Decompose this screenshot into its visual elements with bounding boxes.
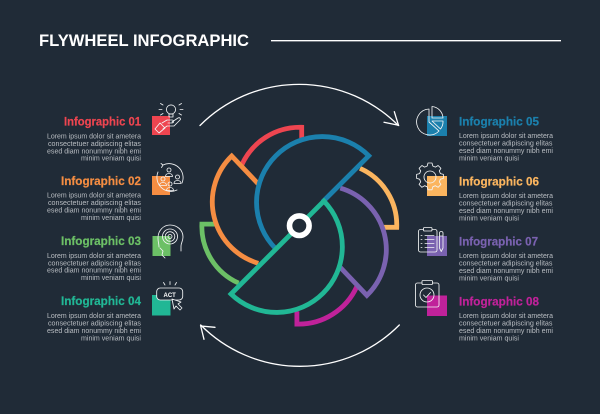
text block 01: consectetuer adipiscing elitas [48,141,142,148]
panel: infographic 02 [47,164,183,222]
arrow: top clockwise [200,84,398,126]
text block 05: esed diam nonummy nibh emi [459,148,553,155]
text block 02: esed diam nonummy nibh emi [47,208,141,214]
panel: infographic 05 [417,106,553,162]
blade: green [202,224,239,283]
act label: ACT [164,293,176,299]
blade: blue half disc [257,137,369,249]
text block 08: consectetuer adipiscing elitas [459,320,553,328]
blade: magenta [297,286,357,324]
text block 06 [459,193,553,222]
heading 02: Infographic 02 [61,174,141,188]
heading 01: Infographic 01 [64,114,141,128]
arrow: bottom clockwise [201,325,399,366]
heading 05: Infographic 05 [459,114,539,128]
icon: pie chart [417,106,447,136]
text block 07: esed diam nonummy nibh emi [459,268,553,275]
panel: infographic 03 [47,225,183,282]
text block 04: consectetuer adipiscing elitas [48,320,142,328]
heading 04: Infographic 04 [61,294,141,308]
icon: team cycle [152,164,183,195]
icon: checklist and pencil [418,228,447,256]
text block 01: Lorem ipsum dolor sit ametera [47,133,141,140]
panel: infographic 08 [416,280,553,342]
text block 03: esed diam nonummy nibh emi [47,268,141,275]
text block 05: consectetuer adipiscing elitas [459,140,553,148]
text block 02: minim veniam quisi [81,215,141,222]
heading 07: Infographic 07 [459,234,538,248]
panel: infographic 04 [47,282,183,342]
text block 04 [47,313,142,342]
icon: gears [417,163,447,196]
text block 08: esed diam nonummy nibh emi [459,328,553,335]
text block 06: Lorem ipsum dolor sit ametera [459,193,553,200]
heading 06: Infographic 06 [459,174,539,188]
text block 02: Lorem ipsum dolor sit ametera [47,193,141,200]
text block 03 [47,253,142,282]
text block 05: Lorem ipsum dolor sit ametera [459,133,553,140]
text block 07: Lorem ipsum dolor sit ametera [459,253,553,260]
panel: infographic 06 [417,163,553,222]
text block 07 [459,253,553,282]
text block 03: minim veniam quisi [81,275,141,282]
text block 08 [459,313,553,342]
icon: head with gear [152,225,183,258]
text block 06: consectetuer adipiscing elitas [459,200,553,208]
blade: purple [340,188,386,295]
text block 03: Lorem ipsum dolor sit ametera [47,253,141,260]
text block 05 [459,133,553,162]
hub ring [290,216,309,236]
heading 08: Infographic 08 [459,294,539,308]
text block 01: minim veniam quisi [81,156,141,163]
text block 08: minim veniam quisi [459,335,519,342]
blade: yellow [360,168,397,227]
text block 01 [47,133,142,163]
icon: clipboard with check [416,280,447,316]
text block 06: minim veniam quisi [459,215,519,222]
text block 07: consectetuer adipiscing elitas [459,260,553,268]
text block 05: minim veniam quisi [459,155,519,162]
panel: infographic 01 [47,104,183,163]
title: FLYWHEEL INFOGRAPHIC [39,32,249,50]
text block 08: Lorem ipsum dolor sit ametera [459,313,553,320]
flywheel diagram [200,84,399,366]
text block 03: consectetuer adipiscing elitas [48,260,142,267]
panel: infographic 07 [418,228,553,282]
blade: teal half disc [231,201,342,312]
text block 07: minim veniam quisi [459,275,519,282]
blade: orange [212,156,258,263]
icon: hand holding light bulb [152,104,183,135]
heading 03: Infographic 03 [61,234,141,248]
blade: red [242,127,302,165]
text block 04: minim veniam quisi [81,335,141,342]
text block 04: Lorem ipsum dolor sit ametera [47,313,141,320]
text block 04: esed diam nonummy nibh emi [47,328,141,335]
text block 06: esed diam nonummy nibh emi [459,208,553,215]
text block 01: esed diam nonummy nibh emi [47,148,141,155]
text block 02: consectetuer adipiscing elitas [48,200,142,207]
text block 02 [47,193,142,222]
